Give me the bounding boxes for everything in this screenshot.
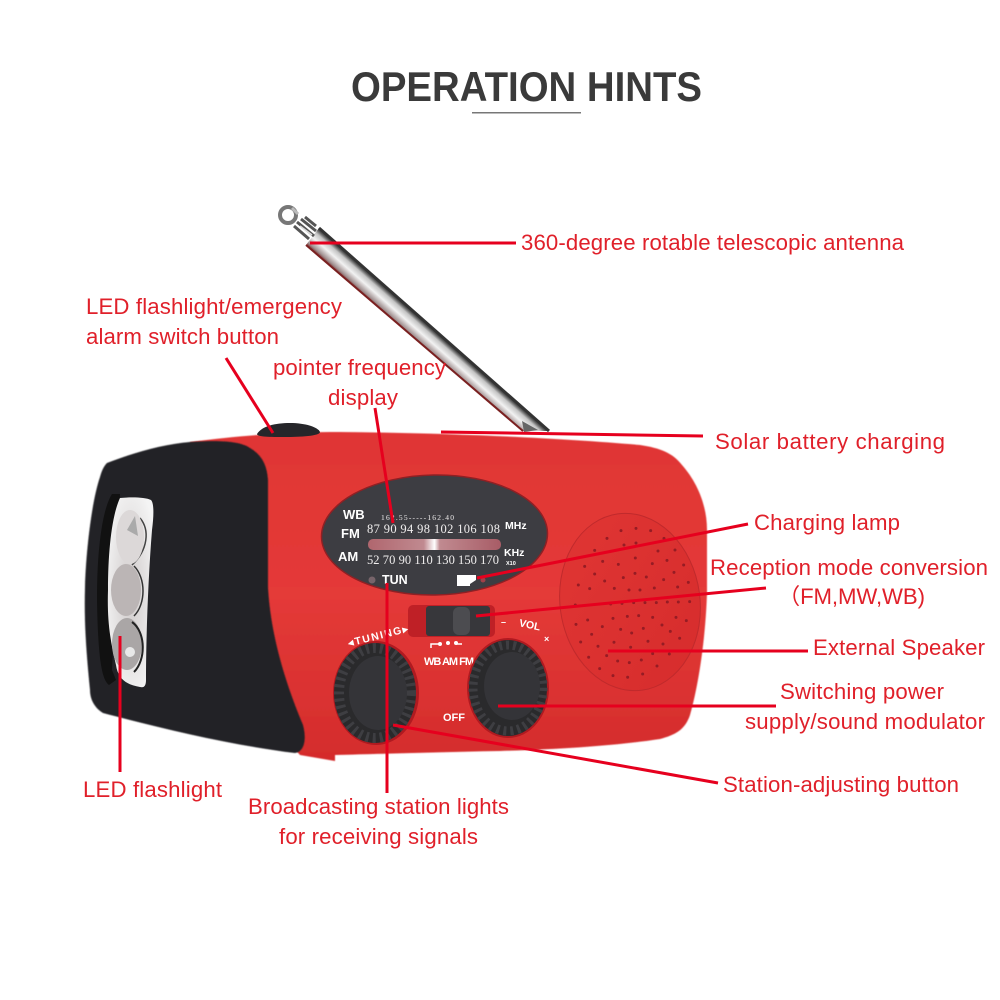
callout: charging lamp [477,510,900,578]
dial labels: ◂TUNING▸ [346,623,411,650]
icon: telescopic antenna [280,207,549,432]
callout: flashlight switch [86,294,343,433]
icon: LED lens [97,494,153,687]
callout: charging lamp: Charging lamp [754,510,900,535]
frequency display: 162.55-----162.40 [381,513,455,522]
mode switch: WB AM FM [424,656,474,668]
flashlight black housing [85,441,305,753]
frequency display: 52 70 90 110 130 150 170 [367,553,499,567]
mode switch [408,605,495,668]
callout: switching power [498,679,986,734]
callout: switching power: supply/sound modulator [745,709,986,734]
radio body [190,432,707,761]
frequency display: WB [343,507,365,522]
callout: antenna: 360-degree rotable telescopic antenna [521,230,905,255]
frequency display: X10 [506,561,516,567]
callout: station-adjusting button [393,725,959,797]
frequency display: TUN [382,573,408,587]
frequency display: 87 90 94 98 102 106 108 [367,522,500,536]
callout: pointer frequency display: pointer frequency [273,355,447,380]
volume knob [467,638,549,738]
dial labels: – [501,617,506,627]
callout: external speaker: External Speaker [813,635,986,660]
frequency display [320,473,549,597]
flashlight button [257,423,320,437]
callout: flashlight switch: alarm switch button [86,324,279,349]
title: OPERATION HINTS [351,63,702,110]
callout: solar charging [441,429,945,454]
frequency display: AM [338,549,358,564]
dial labels [346,617,549,724]
frequency display: FM [341,526,360,541]
speaker grille [548,504,712,700]
callout: LED flashlight: LED flashlight [83,777,222,802]
callout: broadcasting station lights: for receiving signals [279,824,478,849]
callout: switching power: Switching power [780,679,945,704]
callout: broadcasting station lights [248,583,509,849]
callout: pointer frequency display: display [328,385,399,410]
tuning band [368,539,501,550]
callout: reception mode conversion [476,555,988,616]
callout: solar charging: Solar battery charging [715,429,945,454]
frequency display: KHz [504,547,524,559]
callout: reception mode conversion: Reception mode conversion [710,555,988,580]
callout: broadcasting station lights: Broadcasting station lights [248,794,509,819]
dial labels: × [544,634,549,644]
callout: station-adjusting button: Station-adjusting button [723,772,959,797]
tuning knob [333,641,419,745]
dial labels: VOL [518,617,542,634]
callout: pointer frequency display [273,355,447,523]
dial labels: OFF [443,712,465,724]
callout: reception mode conversion: （FM,MW,WB) [778,584,925,609]
callout: flashlight switch: LED flashlight/emergency [86,294,343,319]
frequency display: MHz [505,520,527,532]
